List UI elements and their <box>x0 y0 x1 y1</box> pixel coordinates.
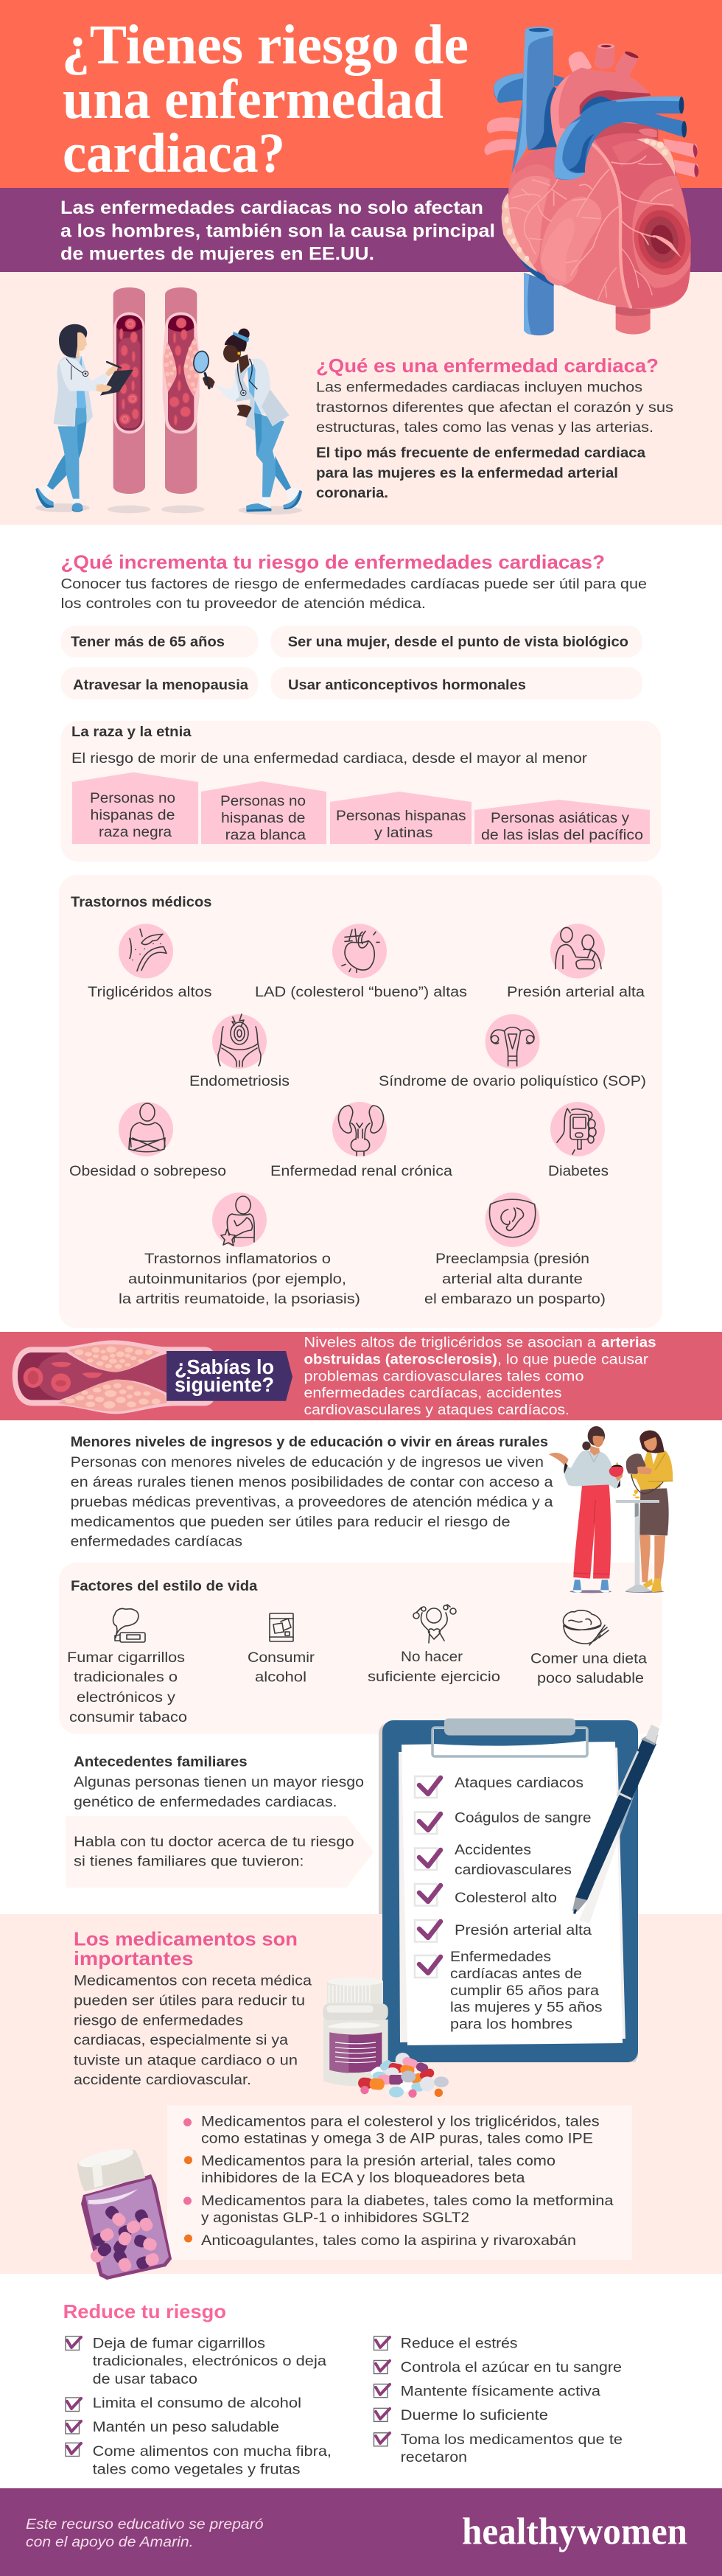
chart: risk ranking by group: raza blanca <box>225 827 306 843</box>
panel: race and ethnicity <box>60 721 661 862</box>
condition labels: Diabetes <box>548 1163 609 1179</box>
icon: inflammation, arm pain <box>212 1193 267 1247</box>
section: reduce your risk: Mantente físicamente activa <box>401 2384 600 2400</box>
icon: high triglycerides <box>119 924 173 978</box>
section: what is heart disease: estructuras, tales como las venas y las arterias. <box>316 419 653 436</box>
header band: orange <box>0 0 722 188</box>
illustration: clipboard with checklist <box>379 1719 659 2066</box>
condition labels: Triglicéridos altos <box>88 984 212 1000</box>
chart: risk ranking by group: raza negra <box>99 824 172 840</box>
text: family history: Antecedentes familiares <box>74 1754 248 1770</box>
illustration: blocked artery <box>163 287 200 494</box>
checklist text: las mujeres y 55 años <box>450 1999 603 2015</box>
section: reduce your risk: tales como vegetales y frutas <box>93 2462 301 2478</box>
footer: con el apoyo de Amarin. <box>26 2534 193 2550</box>
lifestyle labels: suficiente ejercicio <box>368 1669 500 1685</box>
lifestyle labels: poco saludable <box>537 1670 644 1686</box>
section: reduce your risk <box>63 2300 623 2478</box>
text: triglycerides fact: obstruidas (aterosclerosis) <box>304 1352 497 1368</box>
condition labels: la artritis reumatoide, la psoriasis) <box>119 1291 360 1308</box>
subtitle: de muertes de mujeres en EE.UU. <box>60 243 374 264</box>
label: did you know: siguiente? <box>175 1373 274 1396</box>
lifestyle labels: No hacer <box>401 1649 463 1665</box>
section: what is heart disease: ¿Qué es una enfermedad cardiaca? <box>316 355 659 377</box>
section heading: risk factors: Conocer tus factores de riesgo de enfermedades cardíacas puede ser útil para que <box>60 576 647 593</box>
panel: medication list: como estatinas y omega 3 de AIP puras, tales como IPE <box>201 2130 593 2146</box>
chart: risk ranking by group: de las islas del pacífico <box>481 827 643 843</box>
text: income and education: medicamentos que pueden ser útiles para reducir el riesgo de <box>71 1514 511 1530</box>
section: what is heart disease: para las mujeres es la enfermedad arterial <box>316 466 618 481</box>
lifestyle labels: Consumir <box>248 1650 315 1666</box>
pills pile <box>358 2053 449 2098</box>
panel: medication list: inhibidores de la ECA y los bloqueadores beta <box>201 2170 525 2186</box>
text: triglycerides fact: cardiovasculares y ataques cardíacos. <box>304 1402 569 1418</box>
section heading: risk factors: los controles con tu proveedor de atención médica. <box>60 596 426 612</box>
condition labels: arterial alta durante <box>442 1271 583 1288</box>
text: income and education: Personas con menores niveles de educación y de ingresos ue viven <box>71 1454 544 1470</box>
checklist text: cardíacas antes de <box>450 1966 582 1982</box>
text: medications matter: tuviste un ataque cardiaco o un <box>74 2052 298 2068</box>
text: triglycerides fact: , lo que puede causar <box>497 1352 649 1368</box>
section: what is heart disease: El tipo más frecuente de enfermedad cardiaca <box>316 446 645 461</box>
condition labels: Enfermedad renal crónica <box>270 1163 452 1179</box>
condition labels: Trastornos inflamatorios o <box>144 1251 331 1267</box>
panel: medical conditions: Trastornos médicos <box>71 895 212 910</box>
section: reduce your risk: Toma los medicamentos que te <box>401 2432 623 2448</box>
check marks <box>419 1778 441 1973</box>
label: did you know <box>167 1351 292 1401</box>
icon: uterus and ovaries <box>486 1014 540 1069</box>
icon: smoke and vape <box>113 1608 145 1642</box>
section: reduce your risk: Duerme lo suficiente <box>401 2407 548 2423</box>
section: what is heart disease: trastornos diferentes que afectan el corazón y sus <box>316 399 673 416</box>
text: medications matter: Medicamentos con receta médica <box>74 1972 312 1989</box>
panel: race and ethnicity: La raza y la etnia <box>71 725 192 740</box>
text: income and education: pruebas médicas preventivas, a proveedores de atención médica y a <box>71 1494 553 1510</box>
panel: medical conditions <box>59 875 662 1328</box>
illustration: white pill bottle and pills <box>323 1978 449 2098</box>
text: triglycerides fact: Niveles altos de triglicéridos se asocian a <box>304 1335 596 1351</box>
checklist text: cumplir 65 años para <box>450 1983 599 1999</box>
title: cardiaca? <box>63 122 285 184</box>
illustration: doctor with clipboard <box>35 324 133 512</box>
icon: unhealthy food <box>563 1610 609 1645</box>
text: triglycerides fact: problemas cardiovasculares tales como <box>304 1369 584 1385</box>
section background: medications <box>0 1914 722 2274</box>
condition labels: el embarazo un posparto) <box>424 1291 606 1308</box>
panel: lifestyle factors: Factores del estilo de vida <box>71 1579 258 1594</box>
clip <box>432 1719 587 1756</box>
icon: glass of alcohol <box>270 1613 293 1641</box>
panel: race and ethnicity: El riesgo de morir de una enfermedad cardiaca, desde el mayor al menor <box>71 750 588 767</box>
chart: risk ranking by group <box>72 772 650 844</box>
chart: risk ranking by group: y latinas <box>374 825 433 841</box>
text: income and education: en áreas rurales tienen menos posibilidades de contar con acceso a <box>71 1474 553 1490</box>
text: family history <box>74 1754 364 1810</box>
icon: glucose meter <box>550 1102 605 1156</box>
lifestyle labels: tradicionales o <box>74 1669 178 1686</box>
illustration: anatomical heart <box>484 27 698 335</box>
section: reduce your risk: tradicionales, electrónicos o deja <box>93 2353 326 2370</box>
lifestyle labels: Comer una dieta <box>530 1651 647 1667</box>
section: reduce your risk: Limita el consumo de alcohol <box>93 2395 301 2412</box>
lifestyle labels: alcohol <box>255 1669 306 1686</box>
check marks <box>67 2337 390 2454</box>
panel: medication list: Medicamentos para la diabetes, tales como la metformina <box>201 2193 614 2209</box>
illustration: clogged artery <box>13 1340 217 1414</box>
section: reduce your risk: Come alimentos con mucha fibra, <box>93 2443 332 2460</box>
checklist text: Coágulos de sangre <box>455 1809 591 1826</box>
chart: risk ranking by group: hispanas de <box>221 810 305 826</box>
label: did you know: ¿Sabías lo <box>175 1355 274 1378</box>
lifestyle labels: electrónicos y <box>77 1689 175 1706</box>
lifestyle labels <box>67 1649 647 1725</box>
icon: endometriosis <box>212 1014 267 1069</box>
checklist text: Accidentes <box>455 1842 531 1858</box>
illustration: two women with purse and table <box>549 1426 673 1593</box>
footer: healthywomen <box>462 2510 687 2552</box>
text: triglycerides fact: enfermedades cardíacas, accidentes <box>304 1385 562 1401</box>
callout arrow: talk to your doctor <box>66 1816 374 1888</box>
pills: risk factor tags: Ser una mujer, desde el punto de vista biológico <box>288 635 628 650</box>
pills: risk factor tags: Usar anticonceptivos hormonales <box>288 678 526 694</box>
condition labels: Endometriosis <box>189 1073 290 1089</box>
section: what is heart disease: Las enfermedades cardiacas incluyen muchos <box>316 380 642 396</box>
text: triglycerides fact <box>304 1335 656 1418</box>
icon: kidneys <box>332 1102 387 1156</box>
text: medications matter <box>74 1928 312 2088</box>
condition labels: Preeclampsia (presión <box>435 1251 589 1267</box>
illustration: doctors examining arteries <box>35 287 302 514</box>
icon: anatomical heart <box>332 924 387 978</box>
text: medications matter: Los medicamentos son <box>74 1928 298 1950</box>
title <box>62 14 469 184</box>
pills: risk factor tags: Atravesar la menopausia <box>73 678 248 694</box>
panel: medication list: Medicamentos para la presión arterial, tales como <box>201 2153 555 2169</box>
checkboxes <box>415 1776 437 1978</box>
section heading: risk factors: ¿Qué incrementa tu riesgo de enfermedades cardiacas? <box>60 551 605 573</box>
subtitle: Las enfermedades cardiacas no solo afectan <box>60 198 483 218</box>
chart: risk ranking by group: hispanas de <box>90 807 175 823</box>
subtitle <box>60 198 495 264</box>
checklist text: Ataques cardiacos <box>455 1775 583 1791</box>
chart: risk ranking by group: Personas no <box>90 790 175 806</box>
checklist text: cardiovasculares <box>455 1862 572 1878</box>
text: income and education: enfermedades cardíacas <box>71 1534 242 1550</box>
checkboxes: left column <box>66 2336 388 2456</box>
text: medications matter: cardiacas, especialmente si ya <box>74 2032 288 2048</box>
subtitle band: purple <box>0 188 722 272</box>
pills: risk factor tags: Tener más de 65 años <box>71 635 225 650</box>
checklist text <box>450 1775 603 2033</box>
section heading: risk factors <box>60 551 647 612</box>
panel: medication list <box>167 2105 632 2260</box>
condition labels: autoinmunitarios (por ejemplo, <box>128 1271 346 1288</box>
icon: ultrasound fetus <box>486 1193 540 1247</box>
checklist text: para los hombres <box>450 2017 572 2033</box>
chart: risk ranking by group: Personas hispanas <box>336 808 466 824</box>
papers <box>399 1742 625 2045</box>
title: una enfermedad <box>63 69 444 130</box>
lifestyle labels: Fumar cigarrillos <box>67 1650 185 1666</box>
text: medications matter: riesgo de enfermedades <box>74 2012 243 2028</box>
section: reduce your risk: de usar tabaco <box>93 2371 197 2387</box>
section: what is heart disease <box>316 355 673 501</box>
lifestyle labels: consumir tabaco <box>69 1709 187 1725</box>
panel: lifestyle factors <box>59 1563 662 1734</box>
illustration: doctor with magnifying glass <box>192 329 302 512</box>
checklist text: Colesterol alto <box>455 1890 557 1906</box>
condition labels: Obesidad o sobrepeso <box>69 1163 226 1179</box>
text: income and education: Menores niveles de ingresos y de educación o vivir en áreas rurales <box>71 1435 548 1451</box>
icon: no exercise <box>413 1605 456 1643</box>
panel: medication list: y agonistas GLP-1 o inhibidores SGLT2 <box>201 2210 469 2226</box>
title: ¿Tienes riesgo de <box>62 14 469 76</box>
condition labels: Presión arterial alta <box>507 984 645 1000</box>
text: triglycerides fact: arterias <box>601 1335 656 1351</box>
checklist text: Presión arterial alta <box>455 1922 592 1938</box>
text: medications matter: pueden ser útiles para reducir tu <box>74 1993 305 2009</box>
illustration: purple pill bottle <box>77 2146 172 2280</box>
illustration: healthy artery <box>113 287 145 494</box>
chart: risk ranking by group: Personas asiáticas y <box>491 810 629 826</box>
intro section background <box>0 272 722 525</box>
text: medications matter: accidente cardiovascular. <box>74 2072 251 2088</box>
section: reduce your risk: Mantén un peso saludable <box>93 2419 279 2435</box>
icon: overweight body <box>119 1102 173 1156</box>
text: medications matter: importantes <box>74 1947 193 1969</box>
checklist text: Enfermedades <box>450 1949 551 1965</box>
condition labels: Síndrome de ovario poliquístico (SOP) <box>379 1073 646 1089</box>
shadows under figures <box>35 503 302 514</box>
footer <box>0 2488 722 2576</box>
condition labels: LAD (colesterol “bueno”) altas <box>255 984 467 1000</box>
section: reduce your risk: Controla el azúcar en tu sangre <box>401 2359 622 2376</box>
callout arrow: talk to your doctor: si tienes familiares que tuvieron: <box>74 1854 304 1870</box>
text: income and education <box>71 1435 553 1550</box>
condition labels <box>69 984 646 1308</box>
subtitle: a los hombres, también son la causa principal <box>60 221 495 242</box>
bullets <box>183 2118 192 2242</box>
callout arrow: talk to your doctor: Habla con tu doctor acerca de tu riesgo <box>74 1834 354 1850</box>
pen <box>572 1725 659 1924</box>
section: what is heart disease: coronaria. <box>316 486 388 501</box>
panel: medication list: Medicamentos para el colesterol y los triglicéridos, tales <box>201 2114 600 2130</box>
chart: risk ranking by group: Personas no <box>220 793 306 809</box>
pills: risk factor tags <box>60 626 642 699</box>
banner: did you know <box>0 1332 722 1420</box>
panel: medication list: Anticoagulantes, tales como la aspirina y rivaroxabán <box>201 2233 576 2249</box>
section: reduce your risk: Deja de fumar cigarrillos <box>93 2335 265 2351</box>
text: family history: Algunas personas tienen un mayor riesgo <box>74 1774 364 1790</box>
icon: blood pressure check <box>550 924 605 978</box>
footer: Este recurso educativo se preparó <box>26 2516 264 2533</box>
section: reduce your risk: recetaron <box>401 2449 467 2465</box>
section: reduce your risk: Reduce tu riesgo <box>63 2300 226 2322</box>
text: family history: genético de enfermedades cardiacas. <box>74 1794 337 1810</box>
section: reduce your risk: Reduce el estrés <box>401 2335 518 2351</box>
